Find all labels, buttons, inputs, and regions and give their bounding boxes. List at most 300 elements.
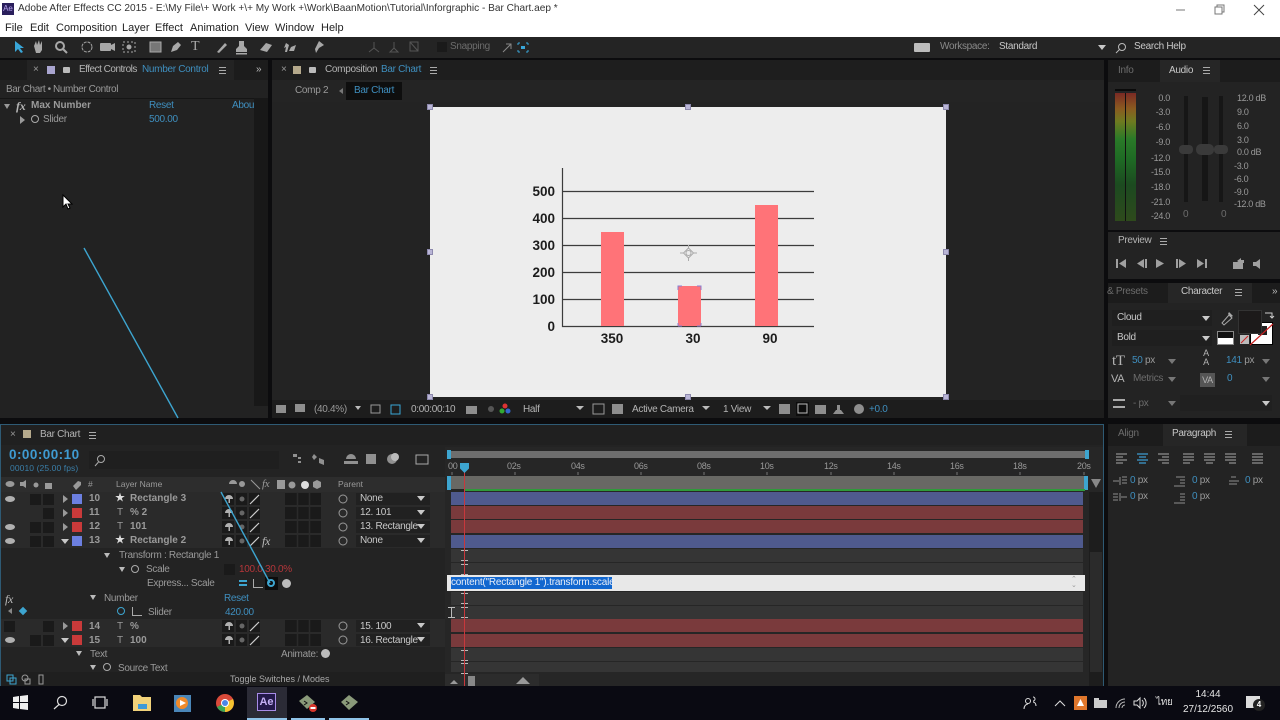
- view count: 1 View: [723, 404, 751, 415]
- source text: [90, 663, 168, 672]
- gray track transform: [451, 549, 1083, 562]
- meter scale: -9.0: [1156, 137, 1170, 147]
- layer 12 101: 12: [89, 521, 100, 532]
- menu bar: Composition: [56, 22, 117, 34]
- stroke width icon: [1113, 399, 1125, 408]
- grid lines and axis: [562, 168, 814, 326]
- active tab bg: [1160, 60, 1220, 82]
- black white swatch: [1217, 331, 1234, 345]
- search icon: [1116, 43, 1126, 54]
- tracking icon: VA: [1202, 375, 1213, 385]
- active tab: [27, 60, 234, 80]
- layer 15 100: 15: [89, 635, 100, 646]
- tracking icon: [1200, 373, 1215, 387]
- indent icons: [1113, 476, 1239, 504]
- header icons: [6, 480, 321, 490]
- keyframe markers: [445, 549, 475, 674]
- fx: fx: [16, 99, 25, 113]
- info tab: Info: [1118, 65, 1133, 76]
- ruler labels: 20s: [1077, 461, 1091, 471]
- stopwatch: [31, 115, 39, 123]
- ruler labels: 08s: [697, 461, 711, 471]
- notification count: [1253, 699, 1265, 711]
- swatch: [23, 430, 31, 438]
- scale property: 100.0,30.0%: [239, 564, 292, 575]
- font family: Cloud: [1117, 312, 1142, 323]
- timeline status bar: [1, 672, 445, 686]
- number effect: fx: [5, 592, 13, 606]
- kerning arrow: [1168, 377, 1176, 382]
- meter scale: 0.0: [1158, 93, 1170, 103]
- layer 10 rectangle 3: [1, 492, 445, 506]
- text group: Text: [90, 649, 107, 660]
- layer 13 rectangle 2: fx: [262, 534, 270, 548]
- leading arrow: [1262, 359, 1270, 364]
- navigator end handle: [1085, 450, 1089, 459]
- expression row: Express... Scale: [147, 578, 214, 589]
- icon: After Effects app: [2, 3, 14, 15]
- slider property: [8, 606, 254, 618]
- eyedropper: [1221, 312, 1233, 326]
- tracking value: 0: [1227, 373, 1232, 384]
- icon: After Effects app: Ae: [3, 4, 13, 13]
- meter scale: -15.0: [1151, 167, 1170, 177]
- meter scale: -18.0: [1151, 182, 1170, 192]
- menu bar: Effect: [155, 22, 183, 34]
- active tab bg: [1163, 424, 1247, 446]
- font family arrow: [1202, 316, 1210, 321]
- align tab: Align: [1118, 428, 1139, 439]
- paragraph tab: Paragraph: [1172, 428, 1216, 439]
- db scale: 3.0: [1237, 135, 1249, 145]
- layer 15 100: T: [117, 635, 123, 646]
- y axis labels: 500: [532, 184, 555, 199]
- index header: #: [88, 479, 92, 489]
- db scale: [1234, 93, 1266, 209]
- layer 14 percent: T: [117, 621, 123, 632]
- indent first: 0 px: [1192, 475, 1210, 486]
- lock icon: [309, 67, 316, 73]
- tab menu: [219, 67, 226, 74]
- tab title: Effect Controls: [79, 64, 137, 75]
- editor scroll arrows: [1071, 577, 1077, 591]
- expression pick whip line upper: [83, 248, 178, 418]
- layer 13 rectangle 2: None: [360, 535, 383, 546]
- layer 10 rectangle 3: None: [360, 493, 383, 504]
- clock time: 14:44: [1195, 689, 1221, 700]
- window title: Adobe After Effects CC 2015 - E:\My File\+ Work +\+ My Work +\Work\BaanMotion\Tutorial\Inforgraphic - Bar Chart.aep *: [18, 3, 558, 14]
- size arrow: [1168, 359, 1176, 364]
- layer 10 rectangle 3: 10: [89, 493, 100, 504]
- resolution: Half: [523, 404, 540, 415]
- layer 14 percent: 15. 100: [360, 621, 391, 632]
- y axis labels: 300: [532, 238, 555, 253]
- timeline switch icons: [293, 453, 428, 465]
- overflow: »: [1272, 286, 1277, 297]
- icon: windows start: [13, 695, 28, 710]
- breadcrumb: [272, 80, 1104, 102]
- leading value: 141 px: [1226, 355, 1254, 366]
- navigator bar: [447, 451, 1087, 458]
- scale property: Scale: [146, 564, 170, 575]
- font size: 50 px: [1132, 355, 1155, 366]
- scroll thumb: [1090, 552, 1102, 672]
- ruler labels: 18s: [1013, 461, 1027, 471]
- swatch: [293, 66, 301, 74]
- close x: ×: [281, 64, 287, 75]
- level meter: [1115, 93, 1136, 221]
- tool tool text: T: [191, 39, 199, 54]
- meter scale: -24.0: [1151, 211, 1170, 221]
- timeline tab: [1, 425, 1103, 445]
- timeline bars: [445, 492, 1085, 686]
- meter scale: -12.0: [1151, 153, 1170, 163]
- preview menu: [1160, 238, 1167, 245]
- tab menu: [89, 432, 96, 439]
- tab strip: [1108, 283, 1280, 303]
- icon: after effects: [257, 693, 276, 711]
- icon: media player: [174, 695, 191, 712]
- meter scale: -6.0: [1156, 122, 1170, 132]
- gray track scale: [451, 563, 1083, 576]
- ruler labels: 16s: [950, 461, 964, 471]
- scale property: [119, 564, 292, 575]
- x axis labels: 90: [762, 331, 778, 346]
- workspace value: Standard: [999, 41, 1037, 52]
- meter center line: [1125, 93, 1126, 221]
- selection handles: [427, 104, 949, 400]
- kerning icon: VA: [1111, 373, 1124, 385]
- system tray icons: [1020, 692, 1152, 714]
- zoom handle: [468, 676, 475, 686]
- name: Max Number: [31, 100, 91, 111]
- tab menu: [1235, 289, 1242, 296]
- layer rows: [1, 492, 445, 686]
- meter scale: -21.0: [1151, 197, 1170, 207]
- current time indicator: [460, 463, 469, 686]
- active crumb: Bar Chart: [354, 85, 394, 96]
- layer 14 percent: 14: [89, 621, 100, 632]
- tab menu: [1203, 67, 1210, 74]
- indent right: 0 px: [1130, 491, 1148, 502]
- icon: chrome: [216, 694, 234, 712]
- ruler labels: 00: [448, 461, 457, 471]
- no stroke slash: [1240, 324, 1274, 346]
- selected expression text: content("Rectangle 1").transform.scale: [451, 577, 614, 588]
- panel: character: [1108, 283, 1280, 418]
- menu bar: Layer: [122, 22, 150, 34]
- menu bar: File: [5, 22, 23, 34]
- text group: Animate:: [281, 649, 318, 660]
- divider row: [0, 98, 268, 99]
- slider zero left: 0: [1183, 209, 1188, 220]
- slider property: Slider: [148, 607, 172, 618]
- clock date: 27/12/2560: [1183, 704, 1233, 715]
- y axis labels: 200: [532, 265, 555, 280]
- red bar layer 11: [451, 506, 1083, 519]
- expression pick whip line lower: [0, 0, 300, 600]
- font style arrow: [1202, 336, 1210, 341]
- layer 10 rectangle 3: Rectangle 3: [130, 493, 186, 504]
- notification count: 4: [1257, 700, 1261, 709]
- snapping label: Snapping: [450, 41, 490, 52]
- window controls: [1176, 4, 1264, 16]
- stroke inner: [1258, 326, 1267, 335]
- slider zero right: 0: [1221, 209, 1226, 220]
- db scale: -3.0: [1234, 161, 1248, 171]
- menu bar: [5, 22, 344, 34]
- text group: [76, 649, 330, 660]
- meter scale: -3.0: [1156, 107, 1170, 117]
- reset: Reset: [149, 100, 174, 111]
- camera: Active Camera: [632, 404, 694, 415]
- font family: [1112, 310, 1212, 326]
- composition canvas: [430, 107, 946, 397]
- zoom level: (40.4%): [314, 404, 347, 415]
- active crumb: [346, 82, 402, 100]
- taskbar: [0, 686, 1280, 720]
- stroke style arrow: [1262, 401, 1270, 406]
- audio tab: Audio: [1169, 65, 1193, 76]
- preview heading: Preview: [1118, 235, 1151, 246]
- work area end: [1084, 476, 1088, 490]
- subheader: Bar Chart • Number Control: [6, 84, 118, 95]
- icon: file explorer: [133, 695, 152, 711]
- timeline scrollbar: [1089, 492, 1103, 686]
- zoom out: [450, 680, 458, 684]
- leading icon: [1203, 348, 1209, 367]
- tool icons: [15, 40, 528, 54]
- ruler labels: 02s: [507, 461, 521, 471]
- close x: ×: [10, 429, 16, 440]
- search icon: [94, 455, 105, 466]
- layer 12 101: [1, 520, 445, 534]
- layer 13 rectangle 2: [1, 534, 445, 548]
- bars: [601, 205, 778, 326]
- tab layer name: Number Control: [142, 64, 208, 75]
- icon: script app: [340, 694, 359, 711]
- search field: [89, 451, 279, 469]
- twirl: [4, 104, 10, 109]
- tab strip: [272, 60, 1104, 80]
- lock icon: [63, 67, 70, 73]
- ruler labels: 14s: [887, 461, 901, 471]
- active tab bg: [1168, 283, 1252, 303]
- expression editor: [447, 575, 1085, 591]
- toolbar: [0, 37, 1280, 58]
- x axis labels: 30: [685, 331, 701, 346]
- menu bar: Window: [275, 22, 314, 34]
- toggle switches: Toggle Switches / Modes: [230, 674, 330, 684]
- layer 13 rectangle 2: ★: [115, 535, 125, 546]
- timecode: 0:00:00:10: [9, 447, 80, 462]
- icon: script app stopped: [298, 694, 318, 713]
- y axis labels: 0: [547, 319, 555, 334]
- active app highlight: [247, 687, 287, 720]
- editor scroll arrows: ⌄: [1071, 582, 1077, 589]
- panel: audio: [1108, 60, 1280, 230]
- cached frames line: [464, 489, 1085, 491]
- font style: Bold: [1117, 332, 1136, 343]
- layer 12 101: 101: [130, 521, 147, 532]
- meter scale: [1151, 93, 1170, 221]
- playback controls: [1116, 258, 1260, 269]
- tab strip: [1108, 60, 1280, 82]
- layer 12 101: T: [117, 521, 123, 532]
- icon: task view: [92, 695, 108, 710]
- number effect: Number: [104, 593, 138, 604]
- tab strip: [1108, 424, 1280, 446]
- tab menu: [430, 67, 437, 74]
- label: Slider: [43, 114, 67, 125]
- work area start: [447, 476, 451, 490]
- no colour swatch: [1240, 335, 1249, 344]
- blue bar layer 13: [451, 535, 1083, 548]
- db scale: 6.0: [1237, 121, 1249, 131]
- exposure: +0.0: [869, 404, 888, 415]
- db scale: -9.0: [1234, 187, 1248, 197]
- running indicators: [247, 718, 369, 720]
- panel: timeline: [0, 424, 1104, 686]
- input language: ไทย: [1156, 697, 1173, 708]
- kerning value: Metrics: [1133, 373, 1163, 384]
- ruler labels: 04s: [571, 461, 585, 471]
- close x: ×: [33, 64, 39, 75]
- stroke width value: - px: [1133, 398, 1148, 409]
- x axis labels: [601, 331, 778, 346]
- menu bar: Help: [321, 22, 344, 34]
- expression row: [147, 577, 291, 590]
- notifications: [1246, 696, 1260, 708]
- size icon: tT: [1112, 353, 1125, 369]
- layer 14 percent: [1, 619, 445, 633]
- gray track slider: [451, 606, 1083, 619]
- comp name: Bar Chart: [40, 429, 80, 440]
- tracking arrow: [1262, 377, 1270, 382]
- ruler labels: 12s: [824, 461, 838, 471]
- layer 12 101: 13. Rectangle: [360, 521, 418, 532]
- meter peak: [1115, 89, 1136, 91]
- icon: search: [53, 695, 68, 710]
- audio sliders: [1179, 96, 1228, 202]
- ruler ticks: [445, 471, 1095, 476]
- y axis labels: 400: [532, 211, 555, 226]
- overflow: »: [256, 64, 261, 75]
- timecode: 0:00:00:10: [411, 404, 455, 415]
- search help: Search Help: [1134, 41, 1186, 52]
- tab menu: [1225, 431, 1232, 438]
- layer switches: [222, 492, 352, 652]
- navigator start handle: [447, 450, 451, 459]
- gray track source text: [451, 662, 1083, 672]
- breadcrumb arrow: [339, 88, 343, 94]
- ruler labels: [445, 459, 1095, 473]
- tab title: Composition: [325, 64, 377, 75]
- number effect: [5, 592, 249, 606]
- parent header: Parent: [338, 479, 363, 489]
- space before: 0 px: [1245, 475, 1263, 486]
- db scale: 12.0 dB: [1237, 93, 1266, 103]
- character tab: Character: [1181, 286, 1222, 297]
- layer 14 percent: %: [130, 621, 139, 632]
- layer 11 percent 2: 12. 101: [360, 507, 391, 518]
- red bar layer 15: [451, 634, 1083, 647]
- font style: [1112, 330, 1212, 346]
- stroke colour: [1250, 322, 1273, 345]
- indent left: 0 px: [1130, 475, 1148, 486]
- gray track number: [451, 592, 1083, 605]
- layer 11 percent 2: [1, 506, 445, 520]
- layer 15 100: 16. Rectangle: [360, 635, 418, 646]
- tab strip: [0, 60, 268, 80]
- red bar layer 14: [451, 619, 1083, 632]
- db scale: -12.0 dB: [1234, 199, 1266, 209]
- value: 500.00: [149, 114, 178, 125]
- slider row: [20, 114, 178, 125]
- viewer icons: [276, 402, 864, 416]
- layer 15 100: 100: [130, 635, 147, 646]
- zoom in: [516, 677, 530, 684]
- layer 11 percent 2: % 2: [130, 507, 147, 518]
- status icons: [6, 674, 44, 684]
- leading icon: A: [1203, 348, 1209, 358]
- workspace arrow: [1098, 45, 1106, 50]
- stroke style dropdown: [1180, 395, 1272, 411]
- twirl: [20, 116, 25, 124]
- title bar: [0, 0, 1280, 37]
- layer 13 rectangle 2: 13: [89, 535, 100, 546]
- db scale: 9.0: [1237, 107, 1249, 117]
- timeline graph area: [445, 447, 1103, 686]
- ruler labels: 10s: [760, 461, 774, 471]
- leading icon: A: [1203, 357, 1209, 367]
- swap arrows: [1265, 312, 1274, 319]
- db scale: -6.0: [1234, 174, 1248, 184]
- fill colour: [1238, 310, 1262, 334]
- red bar layer 12: [451, 520, 1083, 533]
- cti line: [464, 467, 465, 686]
- layer 11 percent 2: T: [117, 507, 123, 518]
- menu bar: Edit: [30, 22, 49, 34]
- tab comp name: Bar Chart: [381, 64, 421, 75]
- layer name header: Layer Name: [116, 479, 162, 489]
- presets tab: & Presets: [1107, 286, 1148, 297]
- effect row: max number: [4, 99, 254, 113]
- panel: preview: [1108, 232, 1280, 279]
- icon: after effects: Ae: [259, 696, 274, 708]
- bar chart: [532, 168, 814, 346]
- panel: effect controls: [0, 60, 268, 418]
- viewer bottom bar: [272, 400, 1104, 418]
- fx header: fx: [262, 478, 269, 490]
- gray track text: [451, 648, 1083, 661]
- layer 13 rectangle 2: Rectangle 2: [130, 535, 186, 546]
- x axis labels: 350: [601, 331, 623, 346]
- layer 11 percent 2: 11: [89, 507, 100, 518]
- workspace label: Workspace:: [940, 41, 990, 52]
- number effect: Reset: [224, 593, 249, 604]
- db scale: 0.0 dB: [1237, 147, 1261, 157]
- comp 2: Comp 2: [295, 85, 328, 96]
- swatch: [47, 66, 55, 74]
- mouse cursor: [62, 194, 73, 210]
- anchor point: [680, 245, 697, 261]
- stroke width arrow: [1168, 401, 1176, 406]
- workspace icon: [914, 43, 930, 52]
- cti head: [460, 463, 469, 473]
- y axis labels: 100: [532, 292, 555, 307]
- layer 10 rectangle 3: ★: [115, 493, 125, 504]
